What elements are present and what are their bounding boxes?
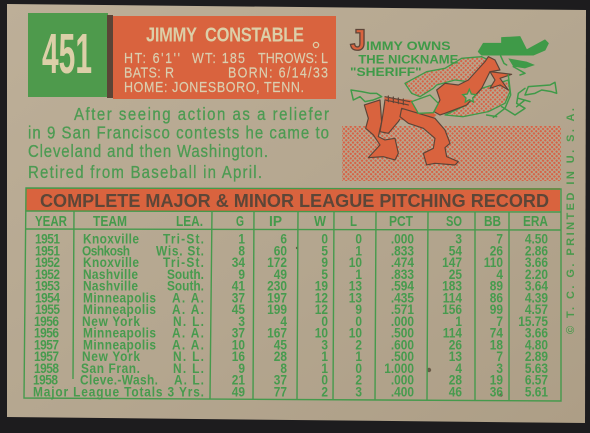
row 1958 San Fran.: San Fran.	[81, 360, 140, 376]
row 1954 Minneapolis	[35, 289, 548, 306]
row 1958 Cleve.-Wash.: 28	[449, 372, 462, 388]
row 1955 Minneapolis: A. A.	[172, 301, 204, 317]
row 1953 Nashville: 3.64	[525, 278, 549, 294]
row 1955 Minneapolis: 1955	[35, 301, 60, 317]
row 1956 Minneapolis: 37	[232, 325, 245, 341]
row 1954 Minneapolis: 86	[490, 289, 503, 306]
row major league totals: 3	[355, 384, 362, 400]
row 1954 Minneapolis: .435	[391, 289, 414, 306]
row 1957 New York: 28	[274, 348, 287, 364]
player stats line 3: HOME: JONESBORO, TENN.	[124, 79, 304, 95]
row 1956 Minneapolis: Minneapolis	[83, 325, 156, 341]
holstered pistol	[351, 90, 382, 102]
hips	[384, 97, 437, 123]
row 1957 New York: New York	[82, 348, 141, 364]
row 1952 Knoxville: Tri-St.	[163, 254, 204, 270]
table title banner: COMPLETE MAJOR & MINOR LEAGUE PITCHING RECORD	[40, 190, 549, 211]
row 1952 Nashville: 9	[238, 266, 245, 282]
column headers: IP	[269, 212, 282, 229]
row 1958 Cleve.-Wash.: 2	[355, 372, 362, 388]
row 1951 Oshkosh	[35, 242, 548, 259]
row 1952 Nashville: 1	[355, 266, 362, 282]
cartoon caption: J	[350, 24, 366, 57]
row 1957 New York: 16	[232, 348, 245, 364]
player stats line 1: WT: 185	[192, 50, 245, 66]
row 1951 Knoxville: 3	[455, 231, 462, 247]
card number: 451	[42, 22, 92, 86]
row 1957 New York: 1957	[34, 348, 59, 364]
neckerchief	[490, 72, 512, 90]
row 1957 Minneapolis: A. A.	[172, 336, 204, 353]
cartoon caption	[350, 24, 459, 79]
row 1953 Nashville: 230	[267, 278, 287, 294]
row 1956 New York: N. L.	[173, 313, 204, 329]
row 1952 Knoxville: 1952	[35, 254, 60, 270]
row 1956 New York: 3	[238, 313, 245, 329]
row 1955 Minneapolis: 9	[355, 301, 362, 317]
row 1955 Minneapolis	[35, 301, 548, 317]
row 1958 San Fran.	[34, 360, 548, 376]
row 1953 Nashville: South.	[167, 278, 204, 294]
player stats line 1	[124, 50, 328, 66]
row 1954 Minneapolis: A. A.	[172, 289, 204, 306]
row 1957 Minneapolis: Minneapolis	[83, 336, 156, 353]
row 1956 Minneapolis: 10	[349, 325, 362, 341]
row 1951 Oshkosh: 26	[490, 242, 503, 259]
row major league totals: 77	[274, 384, 287, 400]
row 1956 New York: New York	[82, 313, 141, 329]
row 1957 New York: 1	[321, 348, 328, 364]
row 1952 Knoxville: .474	[391, 254, 415, 270]
cartoon caption: IMMY OWNS	[366, 40, 451, 53]
row 1957 Minneapolis	[34, 336, 548, 353]
row 1957 New York: N. L.	[173, 348, 204, 364]
row 1951 Knoxville	[35, 231, 548, 247]
row 1956 Minneapolis: 1956	[34, 325, 59, 341]
row 1955 Minneapolis: 4.57	[525, 301, 548, 317]
row 1951 Oshkosh: .833	[391, 242, 414, 259]
row 1958 Cleve.-Wash.: 37	[274, 372, 287, 388]
row 1954 Minneapolis: 13	[349, 289, 362, 306]
rear thigh	[380, 100, 403, 133]
row 1957 Minneapolis: 45	[274, 336, 287, 353]
row 1952 Nashville: Nashville	[83, 266, 138, 282]
row 1957 New York: 13	[449, 348, 462, 364]
row 1956 New York: .000	[391, 313, 414, 329]
vest	[434, 57, 500, 115]
row 1951 Oshkosh: 1951	[35, 242, 60, 259]
row 1952 Knoxville: 147	[442, 254, 462, 270]
row 1951 Oshkosh: 5	[321, 242, 328, 259]
column headers: LEA.	[176, 212, 203, 229]
row 1958 San Fran.: 1.000	[384, 360, 414, 376]
row major league totals: Major League Totals 3 Yrs.	[33, 384, 204, 400]
row 1952 Knoxville: 9	[321, 254, 328, 270]
sheriff star	[463, 89, 476, 102]
row 1957 Minneapolis: 18	[490, 336, 503, 353]
column headers: SO	[446, 212, 462, 229]
row 1956 New York: 1956	[34, 313, 59, 329]
row 1958 San Fran.: 8	[280, 360, 287, 376]
row 1953 Nashville: 1953	[35, 278, 60, 294]
row major league totals: 5.61	[525, 384, 548, 400]
row 1954 Minneapolis: 197	[267, 289, 287, 306]
column headers: G	[236, 212, 244, 229]
row 1951 Knoxville: 0	[321, 231, 328, 247]
row 1958 Cleve.-Wash.: 6.57	[525, 372, 548, 388]
row 1958 San Fran.: 0	[355, 360, 362, 376]
column headers: ERA	[523, 212, 548, 229]
row 1955 Minneapolis: 12	[315, 301, 328, 317]
row 1957 New York: .500	[391, 348, 414, 364]
coat back	[405, 57, 488, 97]
column headers: TEAM	[93, 212, 127, 229]
column headers: BB	[484, 212, 501, 229]
holstered hand	[412, 95, 438, 113]
row 1958 San Fran.: 9	[238, 360, 245, 376]
row 1952 Knoxville: 10	[349, 254, 362, 270]
halftone panel behind cartoon	[342, 126, 561, 181]
row 1952 Nashville: 4	[496, 266, 504, 282]
small ring mark	[313, 42, 319, 48]
column headers: PCT	[389, 212, 413, 229]
row 1954 Minneapolis: 37	[232, 289, 245, 306]
player stats line 1: THROWS: L	[258, 50, 328, 66]
row 1953 Nashville: 183	[442, 278, 462, 294]
row 1958 San Fran.: 3	[496, 360, 503, 376]
row 1955 Minneapolis: 45	[232, 301, 245, 317]
row 1952 Nashville: 1952	[35, 266, 60, 282]
player header panel	[28, 13, 336, 99]
row major league totals: .400	[391, 384, 414, 400]
row 1952 Nashville: .833	[391, 266, 414, 282]
row 1951 Oshkosh: 1	[355, 242, 362, 259]
row 1957 New York: 7	[496, 348, 503, 364]
row 1957 New York: 2.89	[525, 348, 548, 364]
row 1951 Knoxville: 7	[496, 231, 503, 247]
row 1956 Minneapolis: 167	[267, 325, 287, 341]
cartoon caption: THE NICKNAME	[358, 53, 459, 66]
row 1953 Nashville: 13	[349, 278, 362, 294]
orange bio box	[113, 16, 336, 99]
table grid	[24, 188, 561, 401]
row 1956 Minneapolis: A. A.	[172, 325, 204, 341]
row 1958 San Fran.: 5.63	[525, 360, 548, 376]
green number box	[28, 13, 108, 97]
row 1952 Nashville: 49	[274, 266, 287, 282]
row 1956 Minneapolis	[34, 325, 548, 341]
left boot and leg	[364, 100, 398, 160]
row 1951 Oshkosh: 60	[274, 242, 287, 259]
row 1951 Knoxville: .000	[391, 231, 414, 247]
row 1951 Oshkosh: Oshkosh	[82, 242, 130, 259]
row major league totals: 2	[321, 384, 328, 400]
row 1953 Nashville: 19	[315, 278, 328, 294]
column headers: W	[314, 212, 327, 229]
row 1958 San Fran.: 1958	[34, 360, 59, 376]
row 1957 Minneapolis: .600	[391, 336, 414, 353]
row 1952 Knoxville: 3.66	[525, 254, 548, 270]
gun belt	[385, 96, 410, 105]
row 1952 Knoxville: 110	[484, 254, 503, 270]
row 1951 Oshkosh: Wis. St.	[156, 242, 204, 259]
player stats line 1: HT: 6'1''	[124, 50, 180, 66]
player stats line 2: BATS: R	[124, 65, 174, 81]
cartoon: sheriff	[350, 24, 557, 165]
row 1958 Cleve.-Wash.	[33, 372, 548, 388]
row 1955 Minneapolis: .571	[391, 301, 414, 317]
row 1954 Minneapolis: 114	[443, 289, 463, 306]
row 1954 Minneapolis: 1954	[35, 289, 61, 306]
column headers: L	[350, 212, 357, 229]
row 1953 Nashville	[35, 278, 549, 294]
row 1951 Knoxville: 1951	[35, 231, 60, 247]
row 1951 Knoxville: 1	[238, 231, 245, 247]
row 1958 Cleve.-Wash.: .000	[391, 372, 414, 388]
moustache	[508, 58, 535, 68]
biography text: in 9 San Francisco contests he came to	[28, 122, 329, 143]
row 1951 Knoxville: Tri-St.	[163, 231, 204, 247]
row 1956 Minneapolis: 74	[490, 325, 504, 341]
row 1956 New York: 15.75	[518, 313, 548, 329]
row 1958 Cleve.-Wash.: 0	[321, 372, 328, 388]
row 1952 Knoxville	[35, 254, 548, 270]
row 1951 Oshkosh: 54	[449, 242, 463, 259]
row 1956 New York	[34, 313, 548, 329]
row 1958 Cleve.-Wash.: Cleve.-Wash.	[80, 372, 158, 388]
cartoon caption: "SHERIFF"	[350, 66, 422, 79]
row 1958 San Fran.: N. L.	[173, 360, 204, 376]
face and front coat outline	[487, 56, 525, 117]
row 1956 New York: 7	[496, 313, 503, 329]
row 1957 New York: 1	[355, 348, 362, 364]
row major league totals: 36	[490, 384, 503, 400]
row 1955 Minneapolis: 156	[442, 301, 462, 317]
row 1954 Minneapolis: Minneapolis	[83, 289, 156, 306]
column headers	[35, 212, 548, 229]
row 1957 New York	[34, 348, 548, 364]
row 1951 Knoxville: Knoxville	[83, 231, 139, 247]
row 1956 New York: 1	[455, 313, 462, 329]
row 1951 Oshkosh: 2.86	[525, 242, 548, 259]
row 1951 Oshkosh: 8	[238, 242, 245, 259]
row 1957 Minneapolis: 10	[232, 336, 245, 353]
row 1956 New York: 0	[355, 313, 362, 329]
row major league totals: 49	[232, 384, 245, 400]
row 1951 Knoxville: 0	[355, 231, 362, 247]
coat tail	[445, 80, 510, 117]
row 1958 Cleve.-Wash.: 1958	[33, 372, 58, 388]
record table	[24, 188, 561, 401]
row 1956 New York: 0	[321, 313, 328, 329]
row 1953 Nashville: 41	[232, 278, 245, 294]
row 1953 Nashville: Nashville	[83, 278, 138, 294]
row 1957 Minneapolis: 26	[449, 336, 462, 353]
row major league totals	[33, 384, 548, 400]
row 1952 Nashville: 25	[449, 266, 462, 282]
biography text: Retired from Baseball in April.	[28, 162, 262, 182]
row 1955 Minneapolis: 99	[490, 301, 503, 317]
revolver and hand	[502, 82, 557, 115]
row 1952 Knoxville: 34	[232, 254, 246, 270]
row major league totals: 46	[449, 384, 462, 400]
biography text	[28, 104, 329, 182]
row 1952 Nashville	[35, 266, 548, 282]
row 1957 Minneapolis: 4.80	[525, 336, 548, 353]
row 1956 Minneapolis: 3.66	[525, 325, 548, 341]
vertical copyright text: © T. C. G. PRINTED IN U. S. A.	[565, 108, 577, 334]
row 1956 New York: 4	[280, 313, 288, 329]
row 1958 Cleve.-Wash.: 21	[232, 372, 245, 388]
row 1952 Nashville: 2.20	[525, 266, 548, 282]
row 1958 San Fran.: 1	[321, 360, 328, 376]
row 1951 Knoxville: 4.50	[525, 231, 548, 247]
row 1958 San Fran.: 4	[455, 360, 463, 376]
row 1953 Nashville: .594	[391, 278, 415, 294]
player stats line 2	[124, 65, 328, 81]
row 1956 Minneapolis: .500	[391, 325, 414, 341]
row 1951 Knoxville: 6	[280, 231, 287, 247]
biography text: After seeing action as a reliefer	[74, 104, 329, 124]
right boot and leg	[400, 108, 458, 165]
column headers: YEAR	[35, 212, 67, 229]
biography text: Cleveland and then Washington.	[28, 141, 268, 161]
row 1956 Minneapolis: 114	[443, 325, 463, 341]
row 1953 Nashville: 89	[490, 278, 503, 294]
row 1952 Knoxville: Knoxville	[83, 254, 139, 270]
dark divider bar	[107, 15, 113, 98]
row 1955 Minneapolis: Minneapolis	[83, 301, 156, 317]
row 1954 Minneapolis: 12	[315, 289, 328, 306]
player name: JIMMY CONSTABLE	[146, 23, 304, 46]
row 1952 Knoxville: 172	[267, 254, 287, 270]
player stats line 2: BORN: 6/14/33	[228, 65, 328, 81]
hat	[478, 37, 548, 55]
row 1954 Minneapolis: 4.39	[525, 289, 548, 306]
row 1952 Nashville: 5	[321, 266, 328, 282]
row 1952 Nashville: South.	[167, 266, 204, 282]
row 1958 Cleve.-Wash.: A. L.	[174, 372, 204, 388]
row 1957 Minneapolis: 3	[321, 336, 328, 353]
row 1957 Minneapolis: 2	[355, 336, 362, 353]
row 1955 Minneapolis: 199	[267, 301, 287, 317]
row 1956 Minneapolis: 10	[315, 325, 328, 341]
row 1958 Cleve.-Wash.: 19	[490, 372, 503, 388]
row 1957 Minneapolis: 1957	[34, 336, 59, 353]
